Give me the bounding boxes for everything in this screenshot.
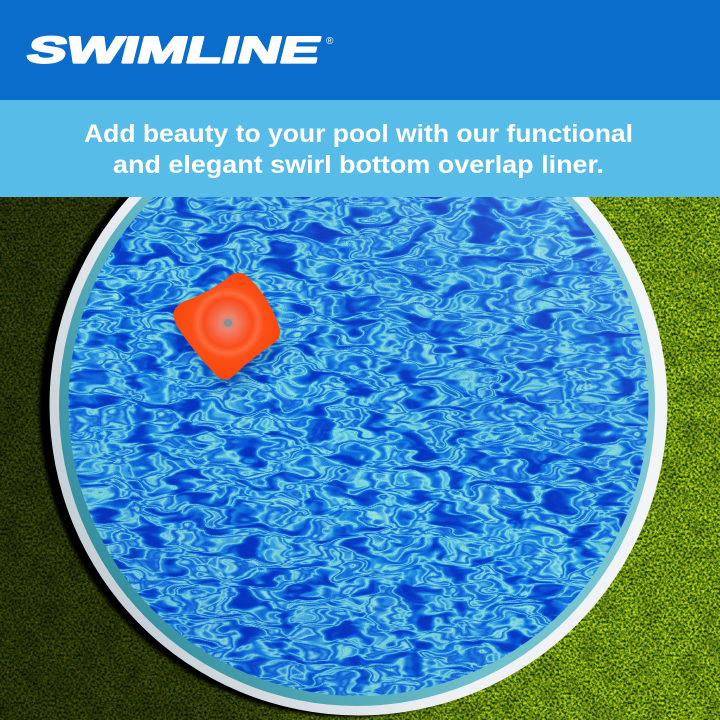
ball shadow	[176, 300, 282, 392]
header band	[0, 0, 720, 100]
photo: pool on grass	[0, 197, 720, 720]
logo: Swimline wordmark	[23, 29, 334, 70]
ball valve	[224, 319, 232, 327]
swirl liner pattern	[60, 190, 660, 710]
tagline text: Add beauty to your pool with our functional	[84, 120, 633, 148]
logo: Swimline wordmark: SWIMLINE	[23, 29, 325, 70]
tagline band	[0, 100, 720, 197]
tagline text: and elegant swirl bottom overlap liner.	[113, 151, 604, 179]
orange floating ball	[173, 273, 280, 380]
pool rim	[50, 197, 668, 716]
pool shadow	[37, 197, 460, 719]
tagline text	[84, 120, 633, 179]
pool wall	[59, 197, 655, 706]
grass background	[0, 197, 720, 720]
logo: Swimline wordmark: ®	[326, 36, 334, 47]
